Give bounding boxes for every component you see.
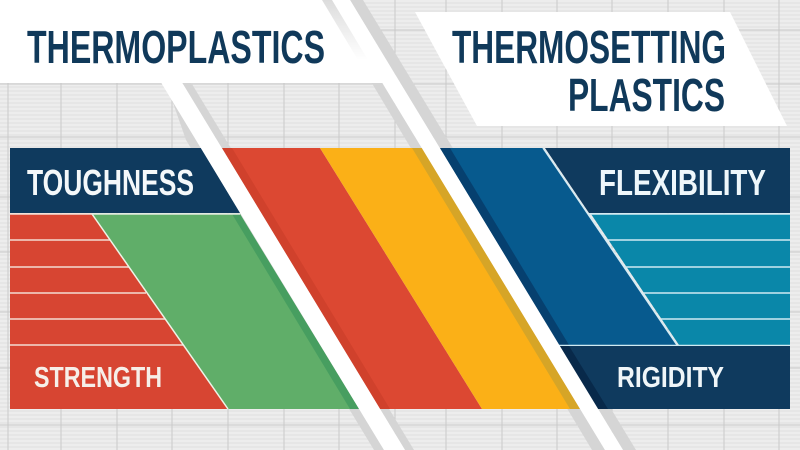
panel: central yellow band	[320, 148, 580, 409]
red striped block with strength label	[10, 214, 228, 409]
title: thermosetting plastics: PLASTICS	[568, 69, 725, 121]
toughness header: TOUGHNESS	[27, 162, 194, 203]
teal striped block	[543, 148, 790, 346]
blue band	[440, 148, 677, 345]
title: thermoplastics: THERMOPLASTICS	[27, 21, 325, 73]
flexibility header	[545, 148, 790, 213]
white diagonal divider right	[332, 0, 623, 450]
rigidity block	[559, 346, 790, 409]
diagonal stripe shadows	[132, 0, 636, 450]
title: thermosetting plastics	[452, 21, 726, 121]
panel: thermosetting comparison (right)	[440, 148, 790, 409]
green band	[92, 214, 359, 409]
panel: central red band	[222, 148, 482, 409]
toughness header	[10, 148, 240, 213]
white diagonal divider left	[111, 0, 405, 450]
title panel: thermoplastics	[0, 0, 400, 83]
rigidity block: RIGIDITY	[617, 362, 724, 394]
panel: thermoplastics comparison (left)	[10, 148, 359, 409]
red striped block with strength label: STRENGTH	[34, 362, 162, 394]
title panel: thermosetting plastics	[415, 12, 787, 126]
